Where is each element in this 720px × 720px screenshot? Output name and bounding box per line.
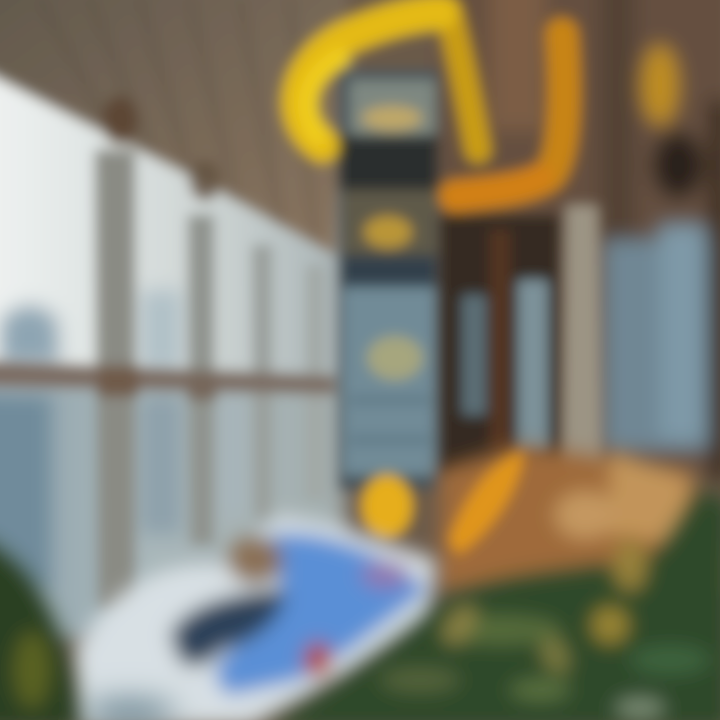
column: right pillar xyxy=(562,205,602,510)
duct: yellow curved pipe xyxy=(299,10,478,150)
plant: left foreground foliage xyxy=(0,530,82,720)
panel: central elevator tower xyxy=(338,70,438,490)
panel: orange floor and railing xyxy=(440,445,720,590)
panel: blue sofa and figure xyxy=(75,515,435,720)
base: bottom floor glow xyxy=(84,700,176,720)
panel: right wall and windows xyxy=(440,0,720,480)
duct: orange pipe xyxy=(455,34,564,196)
plant: right foreground foliage xyxy=(265,490,720,720)
columns: left window mullions xyxy=(95,150,324,610)
panel: ceiling xyxy=(0,0,350,255)
beam: horizontal window rail xyxy=(0,360,335,400)
panel: dark lift shaft xyxy=(440,215,560,475)
panel: left windows xyxy=(0,50,345,640)
accent: orange slanted panel xyxy=(448,450,524,555)
accent: yellow lamp xyxy=(361,474,413,538)
